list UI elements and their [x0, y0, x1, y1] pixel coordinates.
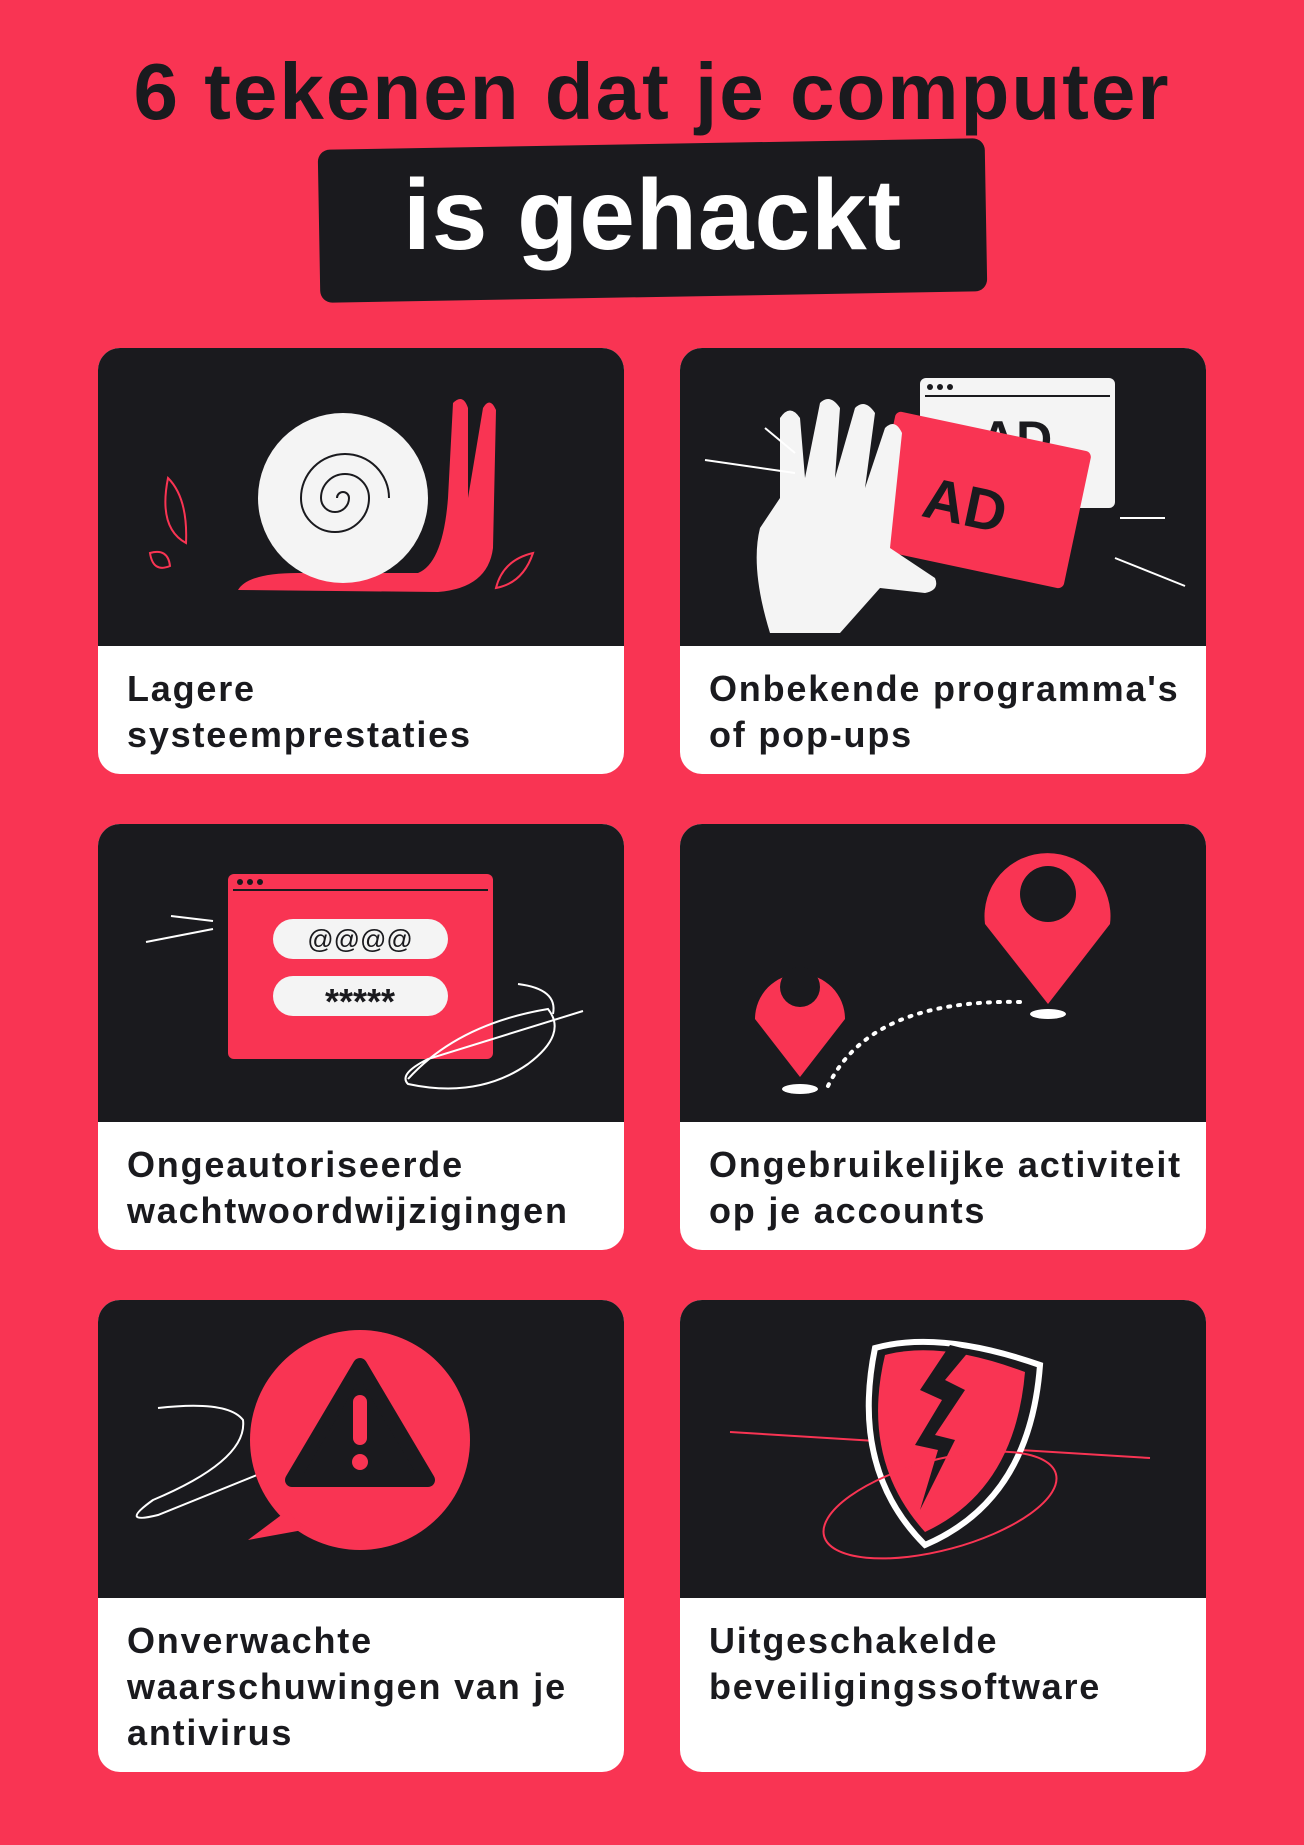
text: label: antivirus — [127, 1712, 293, 1753]
panel: disabled security — [680, 1300, 1206, 1772]
text: label: Lagere — [127, 668, 256, 709]
icon: ads and hand: AD — [917, 465, 1013, 546]
icon: broken shield — [730, 1342, 1150, 1580]
icon: ads and hand — [705, 378, 1185, 633]
panel: popups — [680, 348, 1206, 774]
title line 2: is gehackt — [403, 159, 902, 271]
panel: antivirus warnings — [98, 1300, 624, 1772]
panel: passwords — [98, 824, 624, 1250]
title: 6 tekenen dat je computer — [134, 47, 1170, 136]
text: label — [709, 1144, 1182, 1231]
text: label: Onverwachte — [127, 1620, 373, 1661]
text: label: beveiligingssoftware — [709, 1666, 1101, 1707]
panel: slow performance — [98, 348, 624, 774]
text: label: Onbekende programma's — [709, 668, 1180, 709]
icon: login window: ***** — [325, 981, 395, 1022]
icon: location pins — [755, 853, 1110, 1094]
panel: account activity — [680, 824, 1206, 1250]
icon: login window — [146, 874, 583, 1088]
text: label — [709, 1620, 1101, 1707]
text: label: systeemprestaties — [127, 714, 472, 755]
icon: warning bubble — [137, 1330, 470, 1550]
text: label: Ongeautoriseerde — [127, 1144, 464, 1185]
icon: login window: @@@@ — [307, 924, 413, 954]
text: label — [126, 1620, 567, 1753]
text: label — [709, 668, 1180, 755]
text: label — [126, 1144, 569, 1231]
text: label: waarschuwingen van je — [127, 1666, 567, 1707]
text: label: Ongebruikelijke activiteit — [709, 1144, 1182, 1185]
text: label: of pop-ups — [709, 714, 913, 755]
icon: snail — [150, 399, 533, 592]
text: label: wachtwoordwijzigingen — [127, 1190, 569, 1231]
text: label: op je accounts — [709, 1190, 986, 1231]
title highlight box — [318, 138, 987, 303]
text: label — [127, 668, 472, 755]
icon: ads and hand: AD — [980, 411, 1052, 467]
text: label: Uitgeschakelde — [709, 1620, 998, 1661]
